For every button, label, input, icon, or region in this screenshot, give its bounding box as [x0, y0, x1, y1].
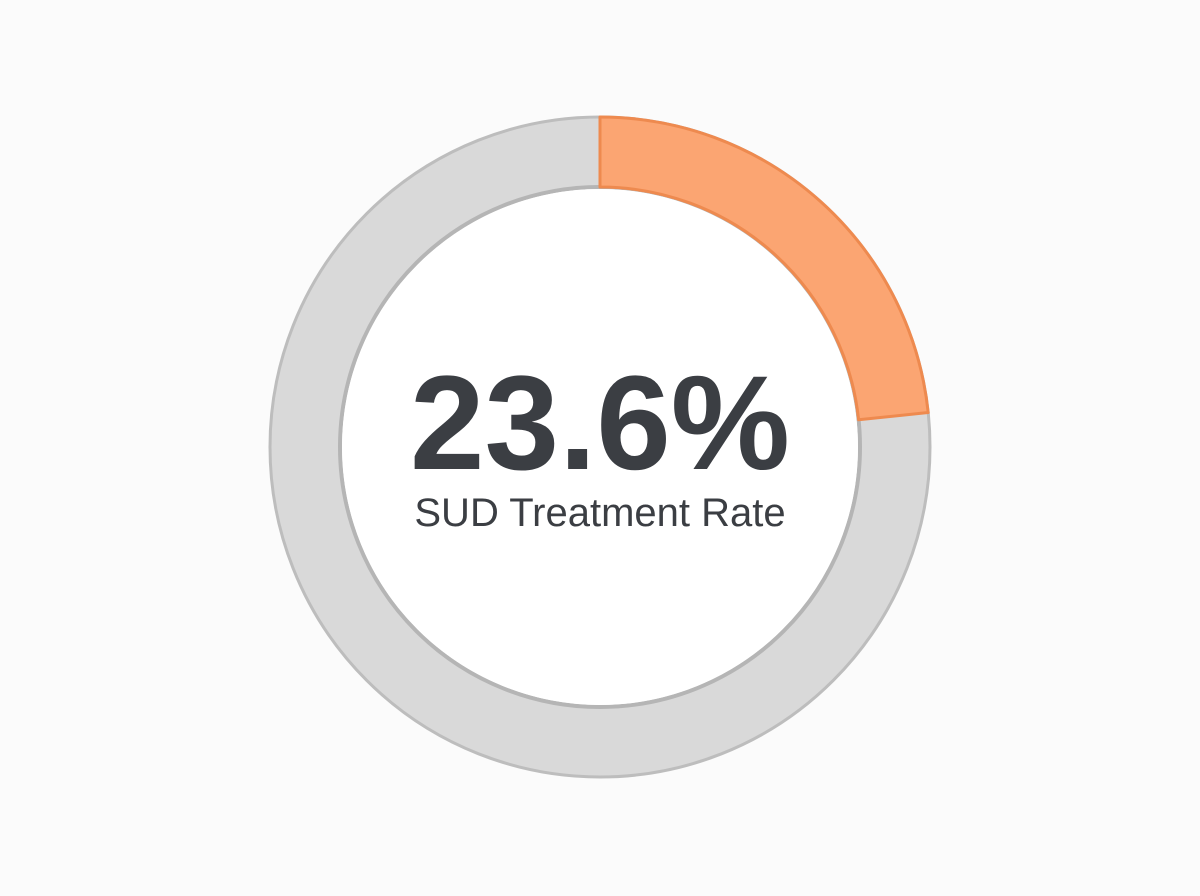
donut ring: background track [270, 117, 930, 777]
donut ring: orange highlighted segment 23.6% [600, 117, 928, 420]
subtitle label: SUD Treatment Rate [414, 491, 786, 535]
main value: 23.6% [410, 349, 790, 498]
